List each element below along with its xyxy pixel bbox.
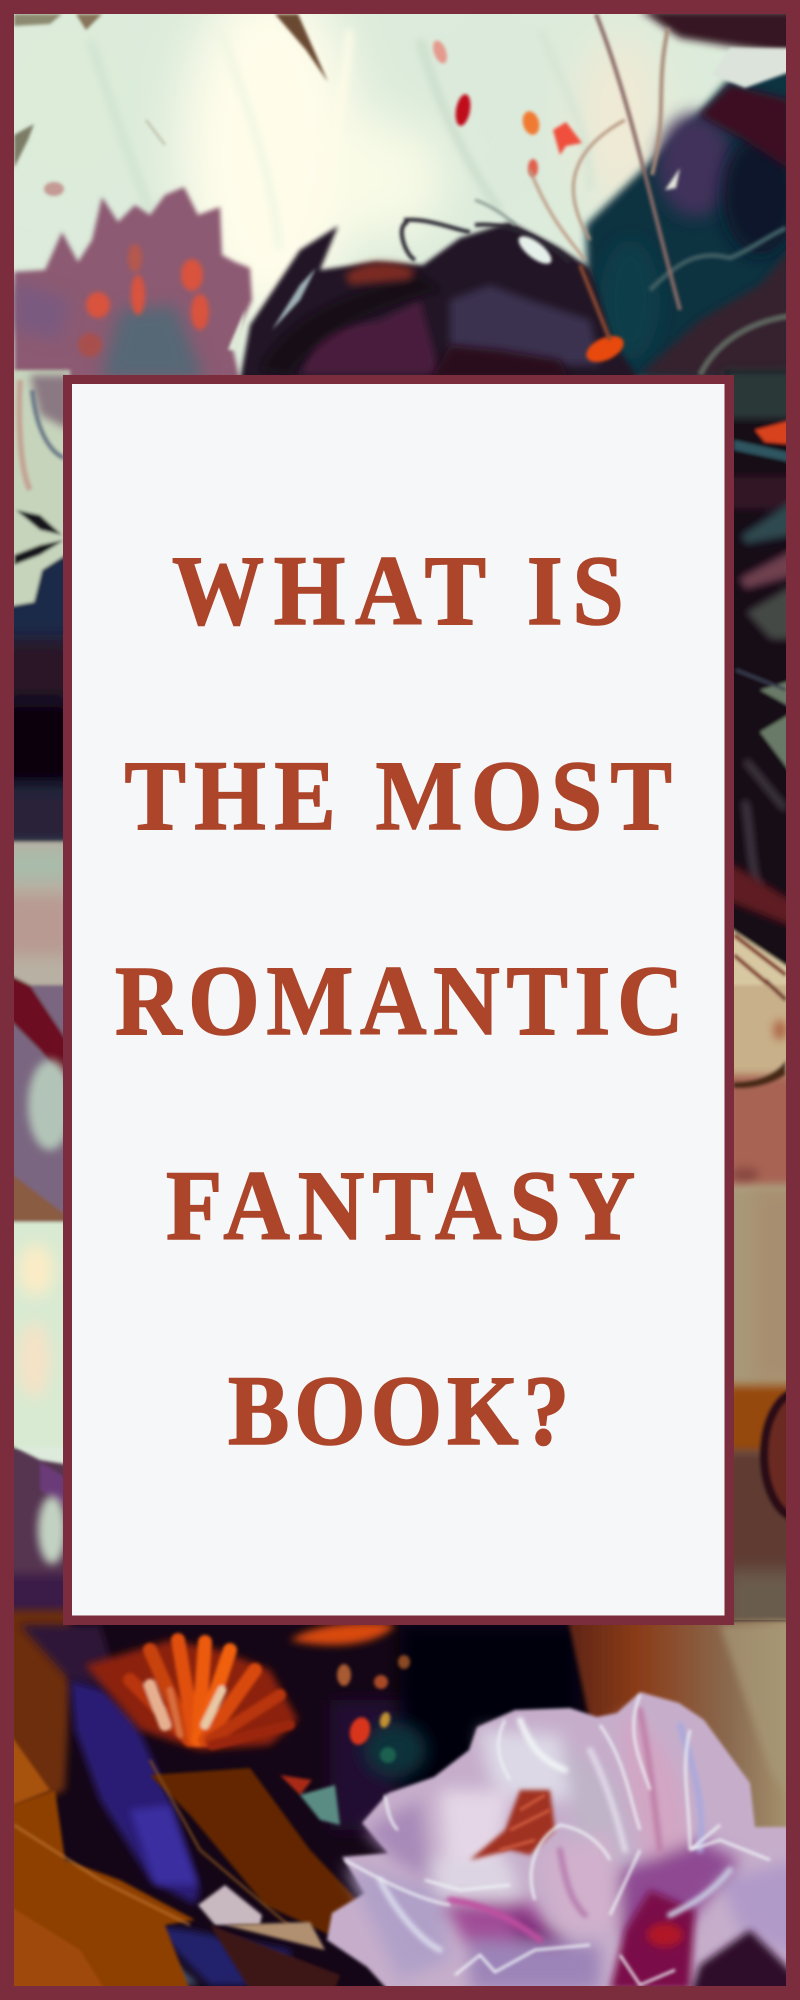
title text: FANTASY bbox=[166, 1149, 635, 1261]
scattered seed spots bbox=[280, 1655, 410, 1825]
title text bbox=[115, 534, 684, 1466]
title text: THE MOST bbox=[124, 739, 672, 851]
left mauve flower bbox=[14, 187, 252, 380]
title text: WHAT IS bbox=[172, 534, 624, 646]
blue and purple feathers bbox=[70, 1680, 200, 1905]
top leaves and petals bbox=[14, 14, 582, 196]
teal and purple foliage, upper right bbox=[530, 10, 800, 380]
title text: ROMANTIC bbox=[115, 944, 684, 1056]
left side strip bbox=[0, 370, 75, 1640]
sky brush streaks bbox=[90, 30, 590, 250]
right-side peony glow over skin bbox=[720, 1625, 790, 1800]
peony flower bbox=[327, 1692, 800, 1995]
title panel bbox=[63, 375, 734, 1625]
dark hair, top centre bbox=[228, 200, 640, 380]
skin gradient bbox=[568, 1620, 800, 1860]
orange flower bbox=[85, 1622, 395, 1750]
brown leaves bbox=[150, 1768, 362, 1935]
right side strip bbox=[725, 370, 800, 1640]
title text: BOOK? bbox=[228, 1354, 569, 1466]
bottom dark floral ground bbox=[0, 1610, 800, 2000]
pale sky washes bbox=[10, 0, 660, 320]
